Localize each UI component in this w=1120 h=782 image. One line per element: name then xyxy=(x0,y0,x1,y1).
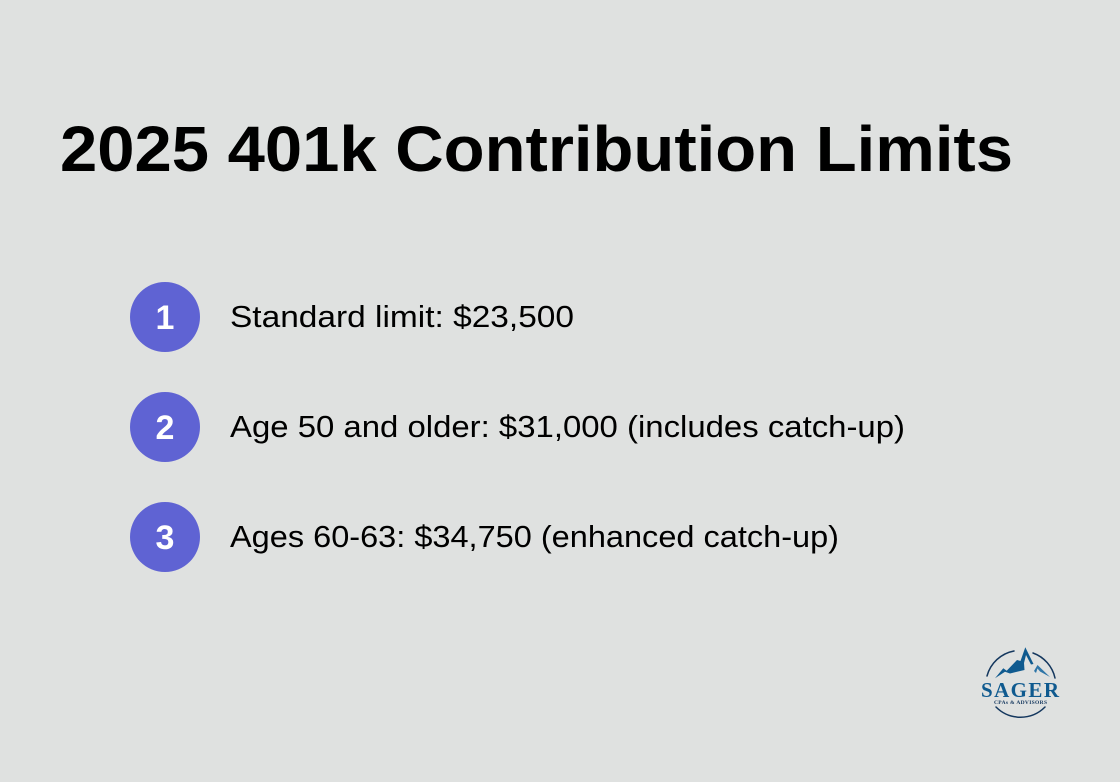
number badge 1: 1 xyxy=(156,299,174,337)
logo: Sager CPAs and Advisors xyxy=(981,647,1060,717)
number badge 3 xyxy=(130,502,200,572)
text: ages 60-63: Ages 60-63: $34,750 (enhanced catch-up) xyxy=(230,519,839,554)
title: 2025 401k Contribution Limits xyxy=(60,113,1013,185)
number badge 2: 2 xyxy=(156,409,174,447)
logo ring xyxy=(987,651,1055,717)
number badge 1 xyxy=(130,282,200,352)
logo wordmark: SAGER xyxy=(981,678,1060,702)
list item 3 xyxy=(130,502,839,572)
number badge 2 xyxy=(130,392,200,462)
icon: mountain xyxy=(995,647,1050,678)
list item 1 xyxy=(130,282,574,352)
number badge 3: 3 xyxy=(156,519,174,557)
text: standard limit: Standard limit: $23,500 xyxy=(230,299,574,334)
logo tagline: CPAs & ADVISORS xyxy=(994,700,1047,706)
text: age 50 and older: Age 50 and older: $31,000 (includes catch-up) xyxy=(230,409,905,444)
list item 2 xyxy=(130,392,905,462)
